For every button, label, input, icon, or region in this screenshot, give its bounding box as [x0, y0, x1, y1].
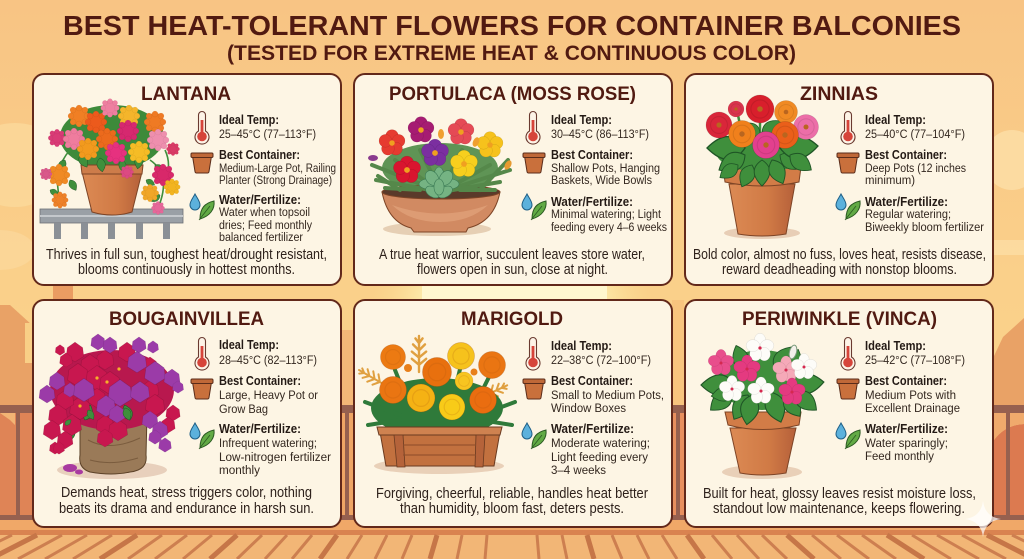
panel: lantana	[33, 74, 341, 285]
icon: thermometer	[526, 338, 540, 370]
icon: thermometer	[841, 112, 855, 144]
description: reward deadheading with nonstop blooms.	[722, 262, 957, 278]
text: water and fertilize: 3–4 weeks	[551, 463, 606, 477]
description: Built for heat, glossy leaves resist moisture loss,	[703, 486, 976, 502]
illustration: periwinkle in pot	[701, 333, 825, 479]
text: best container: Deep Pots (12 inches	[865, 161, 966, 175]
text: ideal temp: Ideal Temp:	[865, 113, 926, 127]
text: water and fertilize: monthly	[219, 463, 261, 477]
icon: thermometer	[526, 112, 540, 144]
text: ideal temp: 22–38°C (72–100°F)	[551, 353, 651, 367]
text: best container: Grow Bag	[219, 402, 268, 416]
text: ideal temp: Ideal Temp:	[219, 113, 279, 127]
panel: portulaca: PORTULACA (MOSS ROSE)	[389, 83, 636, 105]
text: water and fertilize: Water/Fertilize:	[865, 422, 948, 436]
text: water and fertilize: Water/Fertilize:	[865, 195, 948, 209]
description: Demands heat, stress triggers color, nothing	[61, 485, 312, 501]
text: ideal temp: 30–45°C (86–113°F)	[551, 127, 649, 141]
illustration: marigolds in wooden planter	[356, 336, 515, 474]
panel: bougainvillea: BOUGAINVILLEA	[109, 308, 264, 330]
text: water and fertilize: Infrequent watering;	[219, 436, 317, 450]
panel: zinnias: ZINNIAS	[800, 83, 878, 105]
text: best container: Medium Pots with	[865, 388, 956, 402]
text: ideal temp	[551, 113, 649, 141]
description	[46, 247, 327, 278]
icon: sparkle	[965, 501, 1001, 537]
text: water and fertilize: Water when topsoil	[219, 205, 310, 219]
icon: pot	[523, 153, 545, 173]
description	[703, 486, 976, 517]
text: best container: minimum)	[865, 173, 915, 187]
description	[379, 247, 645, 278]
text: water and fertilize: Water/Fertilize:	[551, 195, 633, 209]
text: best container	[219, 148, 336, 187]
text: water and fertilize: balanced fertilizer	[219, 230, 303, 244]
text: water and fertilize: Low-nitrogen fertilizer	[219, 450, 331, 464]
text: best container: Best Container:	[865, 148, 947, 162]
icon: pot	[523, 379, 545, 399]
icon: water and leaf	[190, 423, 214, 449]
text: best container: Best Container:	[865, 374, 947, 388]
text: water and fertilize: Water/Fertilize:	[219, 422, 301, 436]
text: water and fertilize: Minimal watering; Light	[551, 207, 661, 221]
icon: thermometer	[195, 112, 209, 144]
panel: periwinkle: PERIWINKLE (VINCA)	[742, 308, 937, 330]
description: flowers open in sun, close at night.	[417, 262, 608, 278]
text: ideal temp: 25–40°C (77–104°F)	[865, 127, 965, 141]
text: ideal temp: 25–42°C (77–108°F)	[865, 353, 965, 367]
text: best container: Planter (Strong Drainage)	[219, 173, 332, 187]
text: best container: Large, Heavy Pot or	[219, 388, 318, 402]
description: beats its drama and endurance in harsh sun.	[59, 501, 314, 517]
text: ideal temp	[551, 339, 651, 367]
deck planks	[0, 535, 1024, 559]
panel: marigold: MARIGOLD	[461, 308, 563, 330]
text: best container	[865, 374, 960, 415]
title: (TESTED FOR EXTREME HEAT & CONTINUOUS COLOR)	[227, 42, 796, 65]
text: ideal temp	[865, 339, 965, 367]
text: best container: Best Container:	[551, 148, 633, 162]
icon: water and leaf	[190, 194, 214, 220]
text: ideal temp: Ideal Temp:	[219, 338, 279, 352]
illustration: lantana in pot on railing	[40, 99, 183, 239]
icon: pot	[837, 379, 859, 399]
text: water and fertilize	[551, 422, 650, 477]
illustration: bougainvillea in grow bag	[39, 334, 184, 479]
text: ideal temp: 25–45°C (77–113°F)	[219, 127, 316, 141]
description: A true heat warrior, succulent leaves store water,	[379, 247, 645, 263]
text: water and fertilize	[865, 195, 984, 234]
panel: lantana: LANTANA	[141, 83, 231, 105]
text: water and fertilize: Water/Fertilize:	[551, 422, 634, 436]
panel: periwinkle	[685, 300, 993, 527]
icon: water and leaf	[836, 423, 860, 449]
description	[59, 485, 314, 517]
title: BEST HEAT-TOLERANT FLOWERS FOR CONTAINER BALCONIES	[63, 10, 961, 41]
text: water and fertilize	[865, 422, 948, 463]
text: best container: Medium-Large Pot, Railing	[219, 161, 336, 175]
text: ideal temp: Ideal Temp:	[551, 113, 612, 127]
description: Forgiving, cheerful, reliable, handles heat better	[376, 486, 648, 502]
text: best container: Shallow Pots, Hanging	[551, 161, 660, 175]
text: ideal temp: Ideal Temp:	[865, 339, 926, 353]
text: water and fertilize: feeding every 4–6 weeks	[551, 220, 667, 234]
text: ideal temp: 28–45°C (82–113°F)	[219, 353, 317, 367]
text: best container	[551, 148, 660, 187]
text: best container: Excellent Drainage	[865, 401, 960, 415]
illustration: portulaca in bowl	[368, 117, 513, 236]
text: water and fertilize	[219, 193, 313, 244]
description: Thrives in full sun, toughest heat/drought resistant,	[46, 247, 327, 263]
text: water and fertilize: Water sparingly;	[865, 436, 948, 450]
text: best container	[551, 374, 664, 415]
railing	[0, 405, 1024, 520]
text: water and fertilize: Biweekly bloom fertilizer	[865, 220, 984, 234]
icon: water and leaf	[522, 194, 546, 220]
text: water and fertilize: Feed monthly	[865, 449, 935, 463]
text: water and fertilize: Light feeding every	[551, 450, 649, 464]
text: water and fertilize: Regular watering;	[865, 207, 951, 221]
text: best container: Best Container:	[551, 374, 633, 388]
text: water and fertilize: Moderate watering;	[551, 436, 650, 450]
text: best container: Small to Medium Pots,	[551, 388, 664, 402]
panel: portulaca	[354, 74, 672, 285]
icon: pot	[191, 379, 213, 399]
description: blooms continuously in hottest months.	[78, 262, 295, 278]
text: best container: Baskets, Wide Bowls	[551, 173, 652, 187]
text: best container	[219, 374, 318, 416]
text: water and fertilize: dries; Feed monthly	[219, 218, 313, 232]
icon: thermometer	[841, 338, 855, 370]
description	[376, 486, 648, 517]
text: water and fertilize	[551, 195, 667, 234]
text: ideal temp: Ideal Temp:	[551, 339, 612, 353]
text: best container: Window Boxes	[551, 401, 626, 415]
icon: water and leaf	[522, 423, 546, 449]
icon: pot	[191, 153, 213, 173]
icon: pot	[837, 153, 859, 173]
icon: water and leaf	[836, 194, 860, 220]
text: ideal temp	[219, 113, 316, 141]
title	[63, 10, 961, 65]
text: best container: Best Container:	[219, 374, 301, 388]
text: best container: Best Container:	[219, 148, 300, 162]
description: than humidity, bloom fast, deters pests.	[400, 501, 624, 517]
description: standout low maintenance, keeps flowering.	[713, 501, 965, 517]
panel: zinnias	[685, 74, 993, 285]
description	[693, 247, 986, 278]
text: ideal temp	[865, 113, 965, 141]
panel: marigold	[354, 300, 672, 527]
panel: bougainvillea	[33, 300, 341, 527]
text: ideal temp	[219, 338, 317, 367]
text: water and fertilize	[219, 422, 331, 477]
illustration: zinnias in pot	[706, 95, 819, 239]
text: best container	[865, 148, 966, 187]
text: water and fertilize: Water/Fertilize:	[219, 193, 301, 207]
icon: thermometer	[195, 338, 209, 370]
